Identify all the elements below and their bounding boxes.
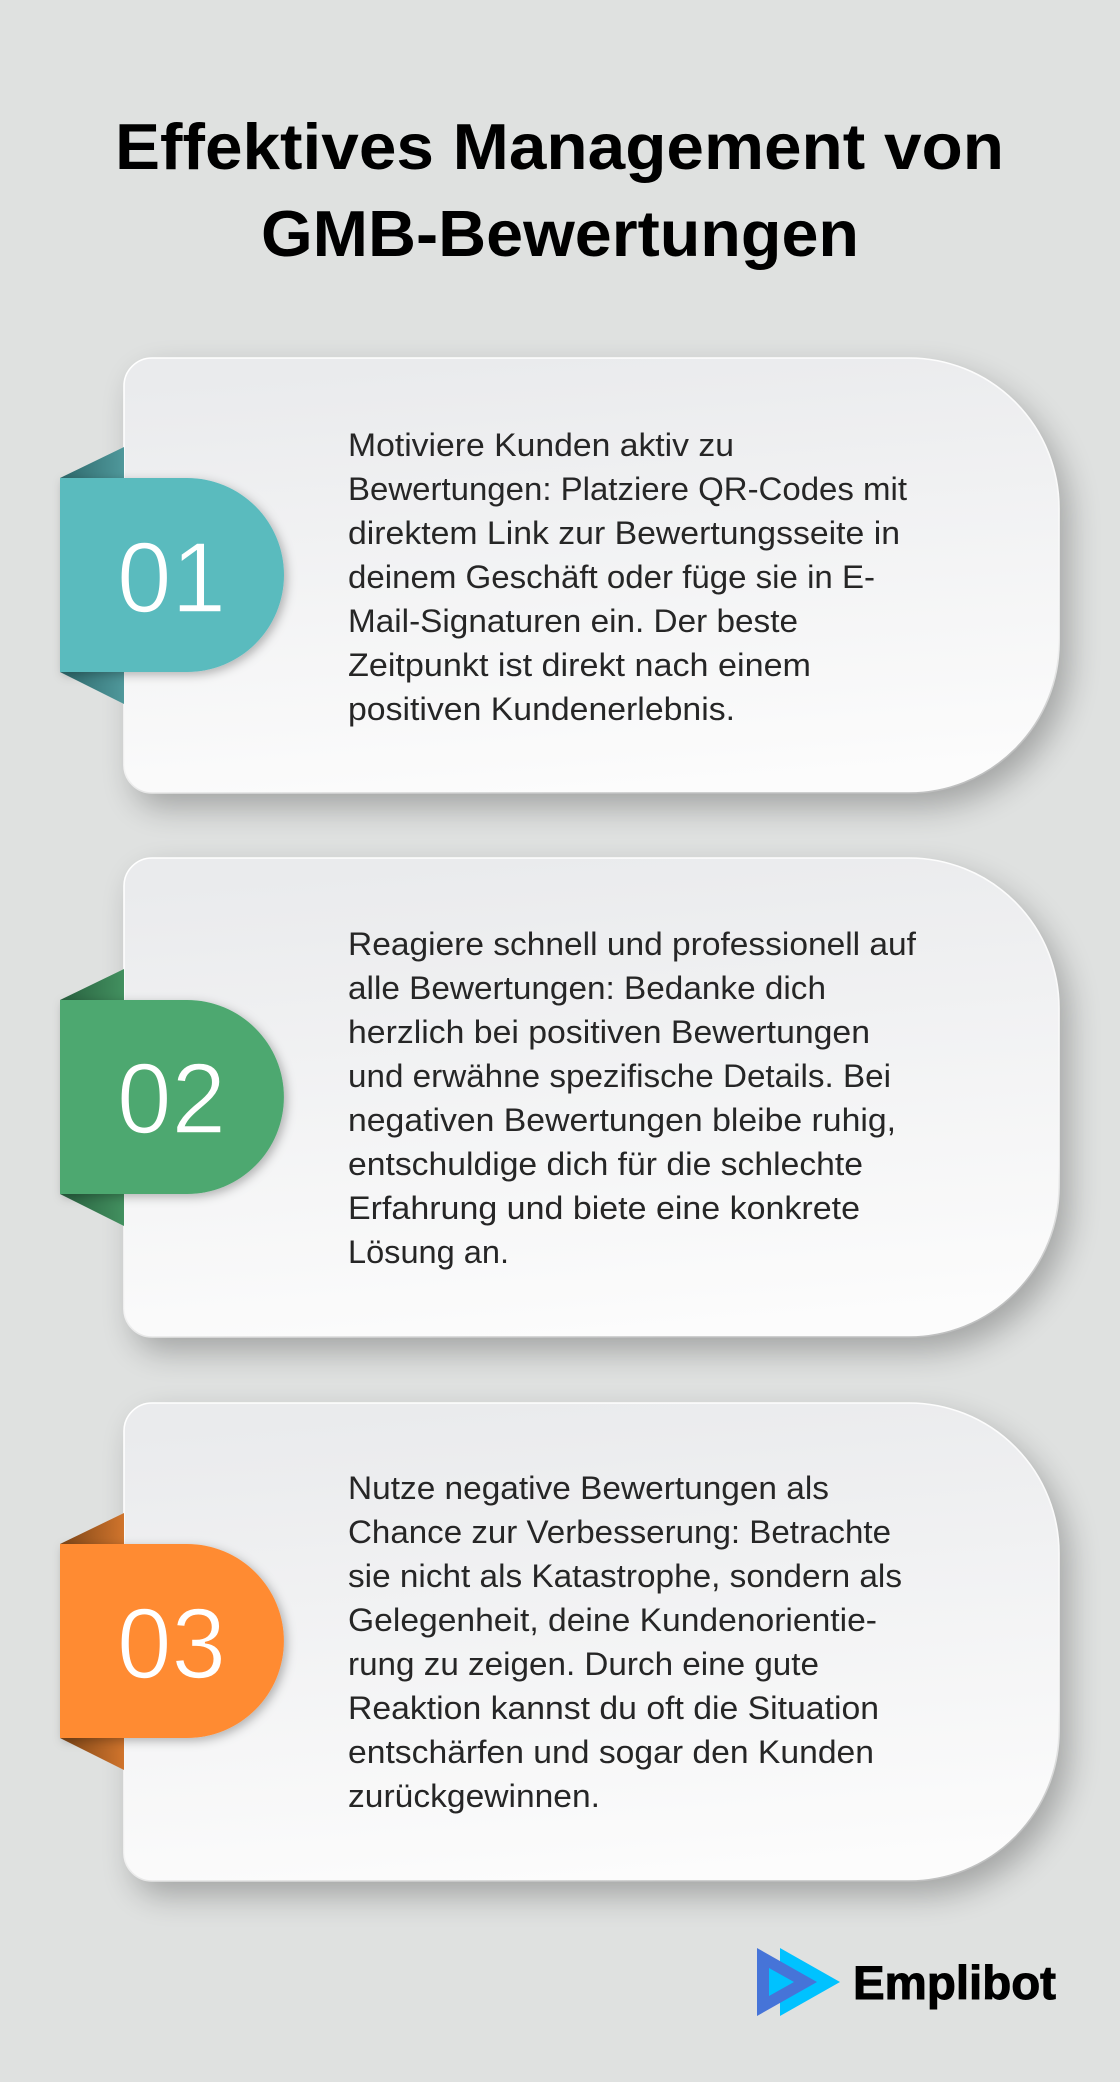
logo wordmark: Emplibot (853, 1956, 1056, 2009)
card: step 2 (124, 858, 1059, 1337)
text: step 3: zurückgewinnen. (348, 1778, 600, 1814)
text: step 3: Chance zur Verbesserung: Betrachte (348, 1514, 891, 1550)
number badge: step 2: 02 (117, 1043, 226, 1155)
text: step 2: Erfahrung und biete eine konkrete (348, 1190, 860, 1226)
card: step 1 (124, 358, 1059, 793)
text: step 1 (348, 427, 907, 727)
number badge: step 1: 01 (117, 522, 226, 634)
number badge: step 2 (60, 1000, 284, 1194)
text: step 2: Lösung an. (348, 1234, 509, 1270)
text: step 3 (348, 1470, 902, 1814)
text: step 2: herzlich bei positiven Bewertungen (348, 1014, 870, 1050)
ribbon fold: step 3 (60, 1513, 124, 1770)
text: step 3: entschärfen und sogar den Kunden (348, 1734, 874, 1770)
text: step 3: Nutze negative Bewertungen als (348, 1470, 829, 1506)
text: step 1: Motiviere Kunden aktiv zu (348, 427, 734, 463)
title (115, 110, 1004, 270)
number badge: step 3: 03 (117, 1588, 226, 1700)
title: GMB-Bewertungen (261, 197, 859, 270)
text: step 3: Reaktion kannst du oft die Situation (348, 1690, 879, 1726)
ribbon fold: step 1 (60, 447, 124, 704)
panel: step 2 (60, 858, 1069, 1351)
text: step 1: positiven Kundenerlebnis. (348, 691, 735, 727)
number badge: step 1 (60, 478, 284, 672)
number badge: step 3 (60, 1544, 284, 1738)
text: step 1: direktem Link zur Bewertungsseite in (348, 515, 900, 551)
panel: step 3 (60, 1403, 1069, 1895)
text: step 1: Bewertungen: Platziere QR-Codes mit (348, 471, 907, 507)
text: step 1: Mail-Signaturen ein. Der beste (348, 603, 798, 639)
text: step 2: entschuldige dich für die schlechte (348, 1146, 863, 1182)
text: step 2: alle Bewertungen: Bedanke dich (348, 970, 826, 1006)
text: step 1: Zeitpunkt ist direkt nach einem (348, 647, 811, 683)
text: step 1: deinem Geschäft oder füge sie in E- (348, 559, 875, 595)
text: step 2: und erwähne spezifische Details. Bei (348, 1058, 891, 1094)
text: step 3: sie nicht als Katastrophe, sondern als (348, 1558, 902, 1594)
text: step 3: Gelegenheit, deine Kundenorientie- (348, 1602, 877, 1638)
text: step 2: Reagiere schnell und professionell auf (348, 926, 917, 962)
icon: play triangles (757, 1948, 840, 2016)
ribbon fold: step 2 (60, 969, 124, 1226)
panel: step 1 (60, 358, 1069, 807)
text: step 2: negativen Bewertungen bleibe ruhig, (348, 1102, 896, 1138)
title: Effektives Management von (115, 110, 1004, 183)
logo: Emplibot (757, 1948, 1056, 2016)
text: step 3: rung zu zeigen. Durch eine gute (348, 1646, 819, 1682)
text: step 2 (348, 926, 917, 1270)
card: step 3 (124, 1403, 1059, 1881)
